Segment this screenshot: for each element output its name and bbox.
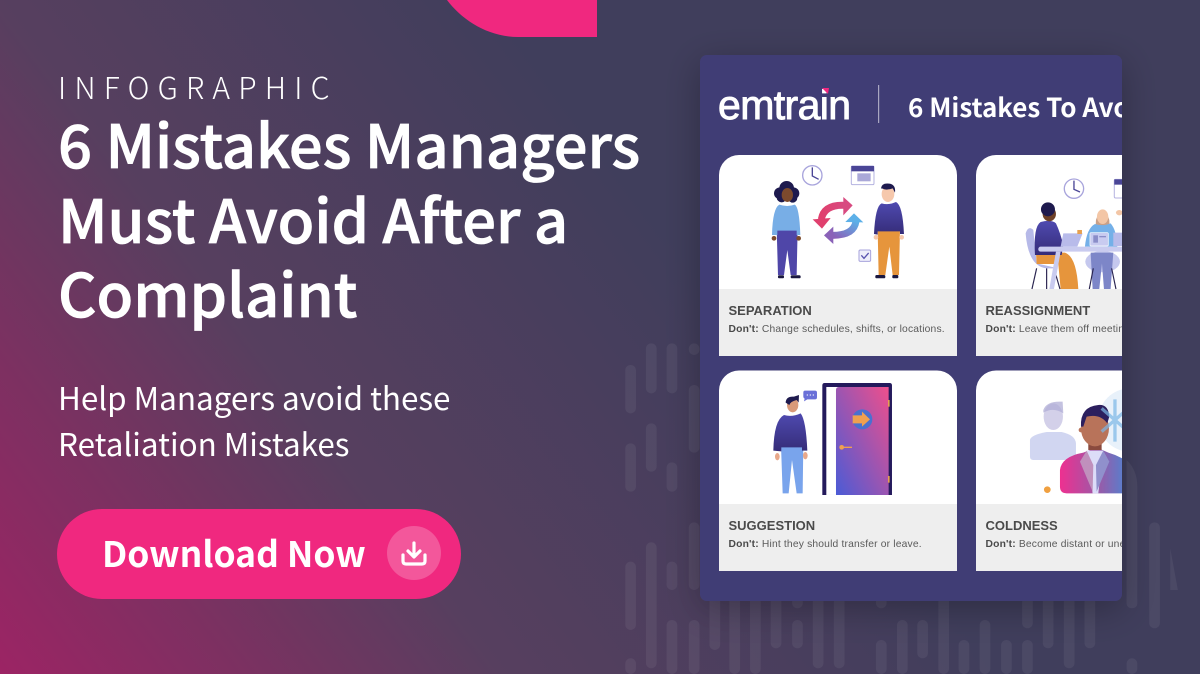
pink corner shape [447, 0, 597, 37]
title: 6 Mistakes Managers [58, 100, 640, 186]
seated person two [1085, 251, 1120, 272]
card text: Don't: Change schedules, shifts, or locations. [728, 324, 945, 335]
download button [57, 509, 461, 599]
card: suggestion [719, 370, 957, 571]
logo: emtrain [719, 88, 849, 120]
subtitle: Help Managers avoid these [58, 375, 450, 420]
seated person one [1026, 228, 1058, 268]
title: Must Avoid After a [58, 175, 568, 261]
woman [774, 187, 781, 198]
card text: Don't: Become distant or unengaged. [986, 539, 1164, 550]
man [882, 188, 894, 202]
card: coldness [976, 370, 1122, 571]
background colleague [1030, 402, 1076, 460]
subtitle [58, 375, 450, 466]
standing man [781, 445, 803, 493]
card title: SUGGESTION [728, 518, 815, 533]
card title: COLDNESS [986, 518, 1058, 533]
table [1038, 247, 1125, 252]
title [58, 100, 640, 335]
cycle arrows [821, 205, 844, 219]
icon: snowflake [1100, 399, 1122, 442]
illustration: coldness [1030, 390, 1122, 494]
illustration: separation [772, 166, 904, 278]
card: separation [719, 155, 957, 356]
header divider [878, 85, 879, 123]
icon: download [387, 526, 441, 580]
card title: REASSIGNMENT [986, 303, 1090, 318]
decorative waveform bars [625, 343, 1178, 674]
foreground man [1060, 450, 1122, 494]
card text: Don't: Leave them off meetings. [986, 324, 1138, 335]
logo: emtrain: emtrain [718, 82, 851, 128]
panel: infographic preview [700, 55, 1164, 601]
download button: Download Now [102, 527, 366, 578]
panel heading: 6 Mistakes To Avoid [908, 88, 1154, 125]
card title: SEPARATION [728, 303, 812, 318]
eyebrow: INFOGRAPHIC: INFOGRAPHIC [58, 64, 338, 108]
card: reassignment [976, 155, 1122, 356]
illustration: suggestion [773, 383, 892, 495]
card text: Don't: Hint they should transfer or leave. [728, 539, 922, 550]
subtitle: Retaliation Mistakes [58, 421, 349, 466]
illustration: reassignment [1026, 179, 1128, 289]
title: Complaint [58, 249, 357, 335]
